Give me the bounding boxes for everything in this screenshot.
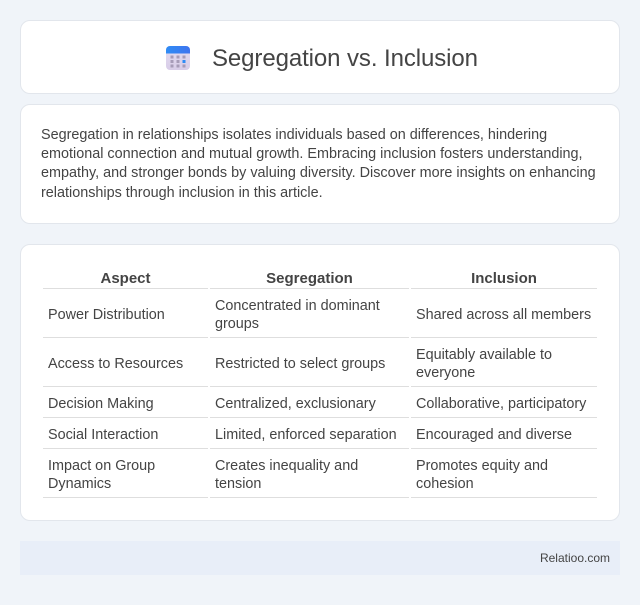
row: social interaction: Limited, enforced separation <box>215 427 397 443</box>
table header: Inclusion <box>471 270 537 287</box>
row: impact on group dynamics: tension <box>215 476 261 492</box>
row: power distribution: groups <box>215 316 259 332</box>
intro paragraph: relationships through inclusion in this article. <box>41 185 323 201</box>
panel: intro text <box>20 104 620 224</box>
table header: Segregation <box>266 270 353 287</box>
row: access to resources: Equitably available to <box>416 347 552 363</box>
panel: comparison table <box>20 244 620 521</box>
row: impact on group dynamics <box>43 458 597 498</box>
row: power distribution: Concentrated in dominant <box>215 298 380 314</box>
row: social interaction: Social Interaction <box>48 427 158 443</box>
intro paragraph: empathy, and stronger bonds by valuing diversity. Discover more insights on enhancing <box>41 165 596 181</box>
intro paragraph <box>41 126 596 201</box>
intro paragraph: emotional connection and mutual growth. Embracing inclusion fosters understanding, <box>41 146 583 162</box>
table header <box>43 270 597 289</box>
row: power distribution: Shared across all members <box>416 307 591 323</box>
row: impact on group dynamics: cohesion <box>416 476 474 492</box>
row: access to resources: Restricted to select groups <box>215 356 385 372</box>
row: access to resources: Access to Resources <box>48 356 183 372</box>
row: impact on group dynamics: Creates inequality and <box>215 458 358 474</box>
row: decision making: Decision Making <box>48 396 154 412</box>
title: Segregation vs. Inclusion <box>212 45 478 72</box>
row: impact on group dynamics: Promotes equity and <box>416 458 548 474</box>
table header: Aspect <box>100 270 151 287</box>
icon: calendar <box>166 46 190 70</box>
footer credit: Relatioo.com <box>540 551 610 565</box>
row: social interaction: Encouraged and diverse <box>416 427 572 443</box>
row: decision making <box>43 396 597 418</box>
panel: title card <box>20 20 620 94</box>
row: impact on group dynamics: Impact on Group <box>48 458 155 474</box>
row: power distribution <box>43 298 597 338</box>
row: decision making: Centralized, exclusionary <box>215 396 376 412</box>
intro paragraph: Segregation in relationships isolates individuals based on differences, hindering <box>41 126 547 142</box>
row: access to resources <box>43 347 597 387</box>
row: access to resources: everyone <box>416 365 475 381</box>
row: power distribution: Power Distribution <box>48 307 165 323</box>
row: decision making: Collaborative, participatory <box>416 396 586 412</box>
row: social interaction <box>43 427 597 449</box>
footer bar <box>20 541 620 575</box>
row: impact on group dynamics: Dynamics <box>48 476 111 492</box>
